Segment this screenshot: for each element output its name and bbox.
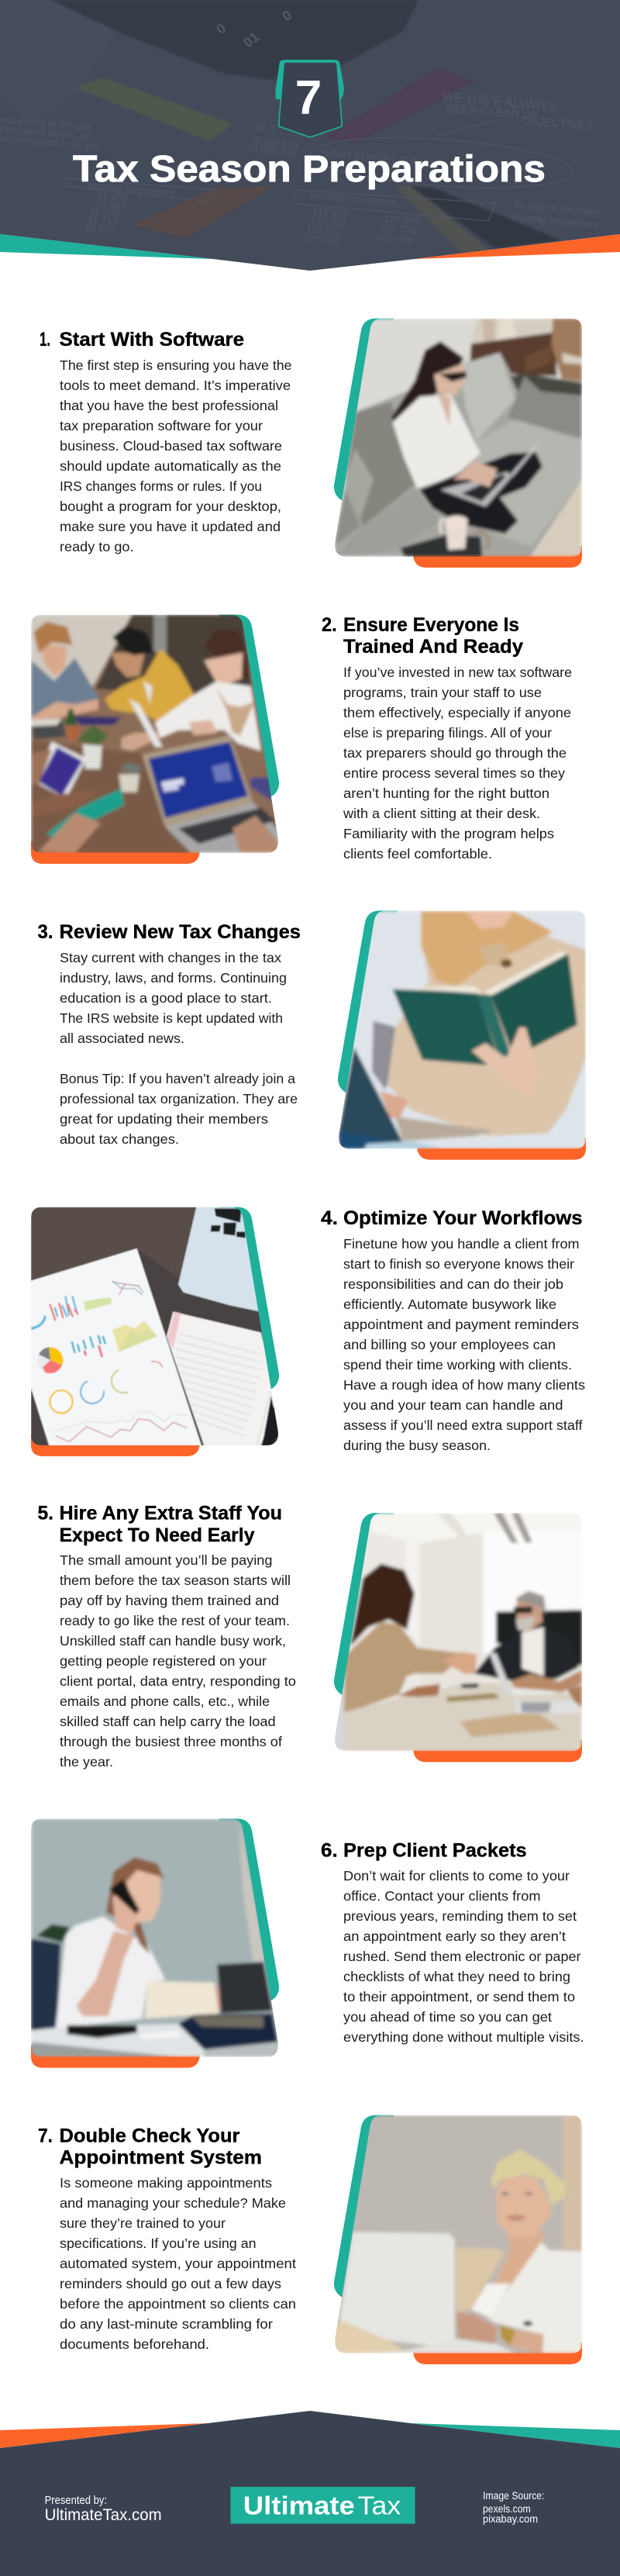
body text: appointment and payment reminders [343, 1317, 579, 1332]
logo: Ultimate [243, 2491, 355, 2519]
body text: do any last-minute scrambling for [60, 2316, 273, 2332]
body text: Don’t wait for clients to come to your [343, 1868, 570, 1884]
body text: everything done without multiple visits. [343, 2029, 584, 2045]
heading: Expect To Need Early [59, 1525, 255, 1546]
body text: all associated news. [60, 1031, 184, 1046]
body text: education is a good place to start. [60, 990, 272, 1006]
body text: clients feel comfortable. [343, 846, 492, 862]
photo: woman on the phone at a desk [31, 1818, 279, 2068]
presented by: UltimateTax.com [45, 2506, 162, 2524]
body text: about tax changes. [60, 1131, 179, 1147]
heading: 3. [37, 921, 53, 943]
header background photo: calculated below, to: [0, 123, 91, 142]
heading: Trained And Ready [343, 636, 523, 658]
body text: automated system, your appointment [60, 2256, 296, 2271]
body text: The IRS website is kept updated with [60, 1010, 283, 1026]
body text: rushed. Send them electronic or paper [343, 1949, 581, 1964]
body text [60, 950, 298, 1147]
body text: through the busiest three months of [60, 1734, 282, 1749]
body text [60, 2175, 296, 2352]
title: Tax Season Preparations [73, 149, 546, 190]
body text: Finetune how you handle a client from [343, 1236, 580, 1252]
heading: Ensure Everyone Is [343, 614, 519, 636]
teal wedge left [0, 234, 213, 259]
heading: Optimize Your Workflows [343, 1207, 583, 1229]
panel: step 7 double check your appointment system [38, 2115, 582, 2364]
header background photo: 01 [240, 29, 262, 50]
header background photo: 18 3 [254, 121, 274, 134]
heading: 1. [40, 329, 50, 350]
body text: business. Cloud-based tax software [60, 438, 282, 454]
header background photo: 127 989 [384, 212, 421, 227]
header background photo: 122 223 [310, 214, 347, 229]
photo: team meeting with laptops [31, 615, 279, 864]
body text: spend their time working with clients. [343, 1357, 572, 1373]
body text: tools to meet demand. It’s imperative [60, 378, 291, 393]
header background photo: 277 735 [380, 222, 417, 237]
body text: previous years, reminding them to set [343, 1908, 577, 1924]
body text: start to finish so everyone knows their [343, 1256, 574, 1272]
heading [322, 614, 523, 658]
body text: great for updating their members [60, 1111, 268, 1127]
heading: 2. [322, 614, 337, 636]
header background photo: 24 808 421 [246, 143, 298, 159]
body text: the year. [60, 1754, 113, 1770]
body text: Unskilled staff can handle busy work, [60, 1633, 286, 1649]
panel: step 1 start with software [40, 319, 582, 568]
header banner [0, 0, 620, 271]
heading: Double Check Your [59, 2125, 240, 2146]
panel: step 5 hire any extra staff [37, 1503, 582, 1770]
body text: to their appointment, or send them to [343, 1989, 575, 2005]
body text: before the appointment so clients can [60, 2296, 296, 2312]
heading: Hire Any Extra Staff You [59, 1503, 282, 1525]
body text: ready to go. [60, 539, 133, 554]
body text: sure they’re trained to your [60, 2215, 226, 2231]
panel: step 2 ensure everyone is trained and ready [31, 614, 572, 864]
header background photo: 0 [213, 20, 229, 37]
body text: reminders should go out a few days [60, 2276, 281, 2291]
body text: emails and phone calls, etc., while [60, 1694, 270, 1709]
badge number: 7 [295, 71, 322, 125]
header background photo: by way of voluntary [515, 199, 601, 218]
body text: them before the tax season starts will [60, 1573, 291, 1588]
heading: Prep Client Packets [343, 1839, 527, 1861]
body text: professional tax organization. They are [60, 1091, 298, 1107]
heading: 7. [38, 2125, 53, 2146]
header background photo: 0 [279, 7, 294, 24]
header background photo: DON'T FORGET THE TAX [322, 147, 441, 169]
heading: Review New Tax Changes [59, 921, 301, 943]
body text: you ahead of time so you can get [343, 2009, 552, 2025]
body text: you and your team can handle and [343, 1397, 563, 1413]
photo: charts on a desk [31, 1207, 279, 1456]
photo: blonde woman with laptop [334, 2115, 582, 2364]
body text: pay off by having them trained and [60, 1593, 279, 1608]
body text: IRS changes forms or rules. If you [60, 478, 262, 494]
body text: with a client sitting at their desk. [343, 806, 540, 821]
body text [343, 1236, 585, 1453]
body text: during the busy season. [343, 1438, 491, 1453]
body text: and billing so your employees can [343, 1337, 556, 1352]
header background photo: 35 575 [89, 206, 120, 219]
header background photo: monthly investment [512, 211, 599, 230]
body text: Familiarity with the program helps [343, 826, 554, 841]
heading [38, 2125, 262, 2168]
image source: pexels.com [483, 2503, 531, 2515]
body text: Have a rough idea of how many clients [343, 1377, 585, 1393]
body text: tax preparers should go through the [343, 745, 567, 761]
body text: an appointment early so they aren’t [343, 1929, 566, 1944]
body text: entire process several times so they [343, 765, 565, 781]
footer [0, 2411, 620, 2576]
body text: documents beforehand. [60, 2336, 209, 2352]
presented by [45, 2495, 162, 2524]
header background photo: monthly investment [87, 179, 174, 199]
header background photo: escalating at 6% p/a [0, 113, 91, 133]
body text: programs, train your staff to use [343, 685, 542, 700]
body text: The first step is ensuring you have the [60, 357, 291, 373]
body text: skilled staff can help carry the load [60, 1714, 276, 1729]
panel: step 6 prep client packets [31, 1818, 584, 2068]
body text: make sure you have it updated and [60, 519, 281, 534]
body text: getting people registered on your [60, 1653, 267, 1669]
body text [60, 357, 291, 554]
body text [60, 1552, 296, 1770]
body text: responsibilities and can do their job [343, 1276, 563, 1292]
image source: pixabay.com [483, 2513, 538, 2525]
presented by: Presented by: [45, 2495, 107, 2507]
body text: client portal, data entry, responding to [60, 1673, 296, 1689]
body text: them effectively, especially if anyone [343, 705, 571, 720]
body text: checklists of what they need to bring [343, 1969, 570, 1984]
heading: 5. [37, 1503, 53, 1525]
header background photo: 6 486 529 [254, 135, 300, 150]
header background photo: BEEN CLEAR OF [446, 102, 539, 123]
logo: Tax [358, 2491, 401, 2519]
footer background [0, 2411, 620, 2576]
body text: Bonus Tip: If you haven’t already join a [60, 1071, 295, 1086]
body text: Is someone making appointments [60, 2175, 272, 2191]
header background photo: WE HAVE ALWAYS [442, 89, 557, 114]
body text: assess if you’ll need extra support staff [343, 1417, 583, 1433]
badge [276, 60, 344, 137]
header background photo: 452 094 [376, 231, 413, 246]
heading: 6. [321, 1839, 338, 1861]
body text [343, 665, 572, 862]
header background photo: 39 973 [84, 222, 115, 235]
body text [343, 1868, 584, 2045]
heading: 4. [321, 1207, 338, 1229]
orange wedge right [415, 234, 620, 259]
body text: aren’t hunting for the right button [343, 786, 549, 801]
body text: The small amount you’ll be paying [60, 1552, 273, 1568]
header background photo: 37 710 [87, 214, 118, 227]
orange wedge left [0, 2423, 208, 2448]
heading [37, 1503, 282, 1546]
body text: ready to go like the rest of your team. [60, 1613, 290, 1628]
body text: tax preparation software for your [60, 418, 263, 433]
photo: woman on sofa with laptop [334, 319, 582, 568]
body text: bought a program for your desktop, [60, 499, 281, 514]
image source: Image Source: [483, 2490, 544, 2502]
body text: office. Contact your clients from [343, 1888, 541, 1904]
photo: business handshake at a table [334, 1513, 582, 1762]
body text: industry, laws, and forms. Continuing [60, 970, 287, 986]
logo [231, 2487, 415, 2524]
body text: Stay current with changes in the tax [60, 950, 281, 965]
body text: else is preparing filings. All of your [343, 725, 552, 741]
teal wedge right [411, 2423, 620, 2448]
photo: woman reading a green book [338, 910, 586, 1160]
panel: step 4 optimize your workflows [31, 1207, 585, 1456]
heading: Appointment System [59, 2146, 262, 2168]
header background photo: 31 662 [97, 191, 128, 204]
body text: and managing your schedule? Make [60, 2195, 286, 2211]
body text: efficiently. Automate busywork like [343, 1297, 556, 1312]
body text: If you’ve invested in new tax software [343, 665, 572, 680]
body text: should update automatically as the [60, 458, 281, 474]
header background photo: 137 330 [302, 233, 339, 247]
heading: Start With Software [59, 329, 244, 350]
body text: that you have the best professional [60, 398, 278, 413]
header background photo: OBJECTIVES [521, 114, 594, 133]
header background photo: 129 552 [306, 223, 343, 238]
header background photo [0, 0, 620, 271]
panel: step 3 review new tax changes [37, 910, 586, 1160]
header background photo: 115 305 [312, 205, 349, 220]
image source [483, 2490, 544, 2525]
header background photo: monthly investment [310, 189, 398, 209]
header background photo: 33 562 [95, 199, 126, 212]
header background photo: accumulated in 18 yrs [0, 132, 99, 152]
body text: specifications. If you’re using an [60, 2236, 257, 2251]
